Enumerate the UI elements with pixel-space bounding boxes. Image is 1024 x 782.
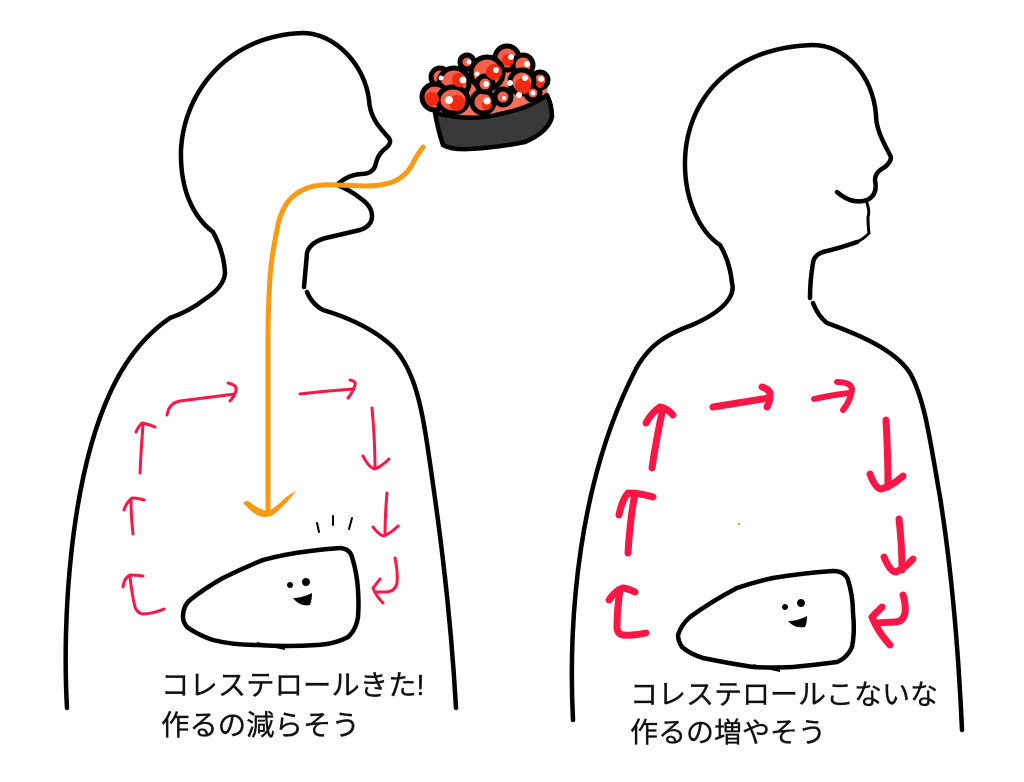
- right figure: body silhouette: [572, 45, 962, 730]
- right caption: [630, 679, 938, 748]
- right caption: コレステロールこないな: [630, 679, 938, 710]
- left caption: [161, 670, 424, 742]
- left caption: 作るの減らそう: [161, 710, 360, 742]
- icon: orange speck: [738, 523, 740, 525]
- left figure: body silhouette: [66, 33, 456, 708]
- left figure: thin red cycle arrows: [123, 380, 398, 614]
- left figure: orange food path arrow: [243, 147, 423, 517]
- right figure: bold red cycle arrows: [609, 382, 913, 645]
- right figure: liver with face: [678, 571, 854, 671]
- left caption: コレステロールきた!: [161, 670, 424, 702]
- left figure: liver with face: [183, 516, 358, 649]
- right caption: 作るの増やそう: [630, 717, 826, 748]
- icon: ikura sushi: [422, 46, 552, 149]
